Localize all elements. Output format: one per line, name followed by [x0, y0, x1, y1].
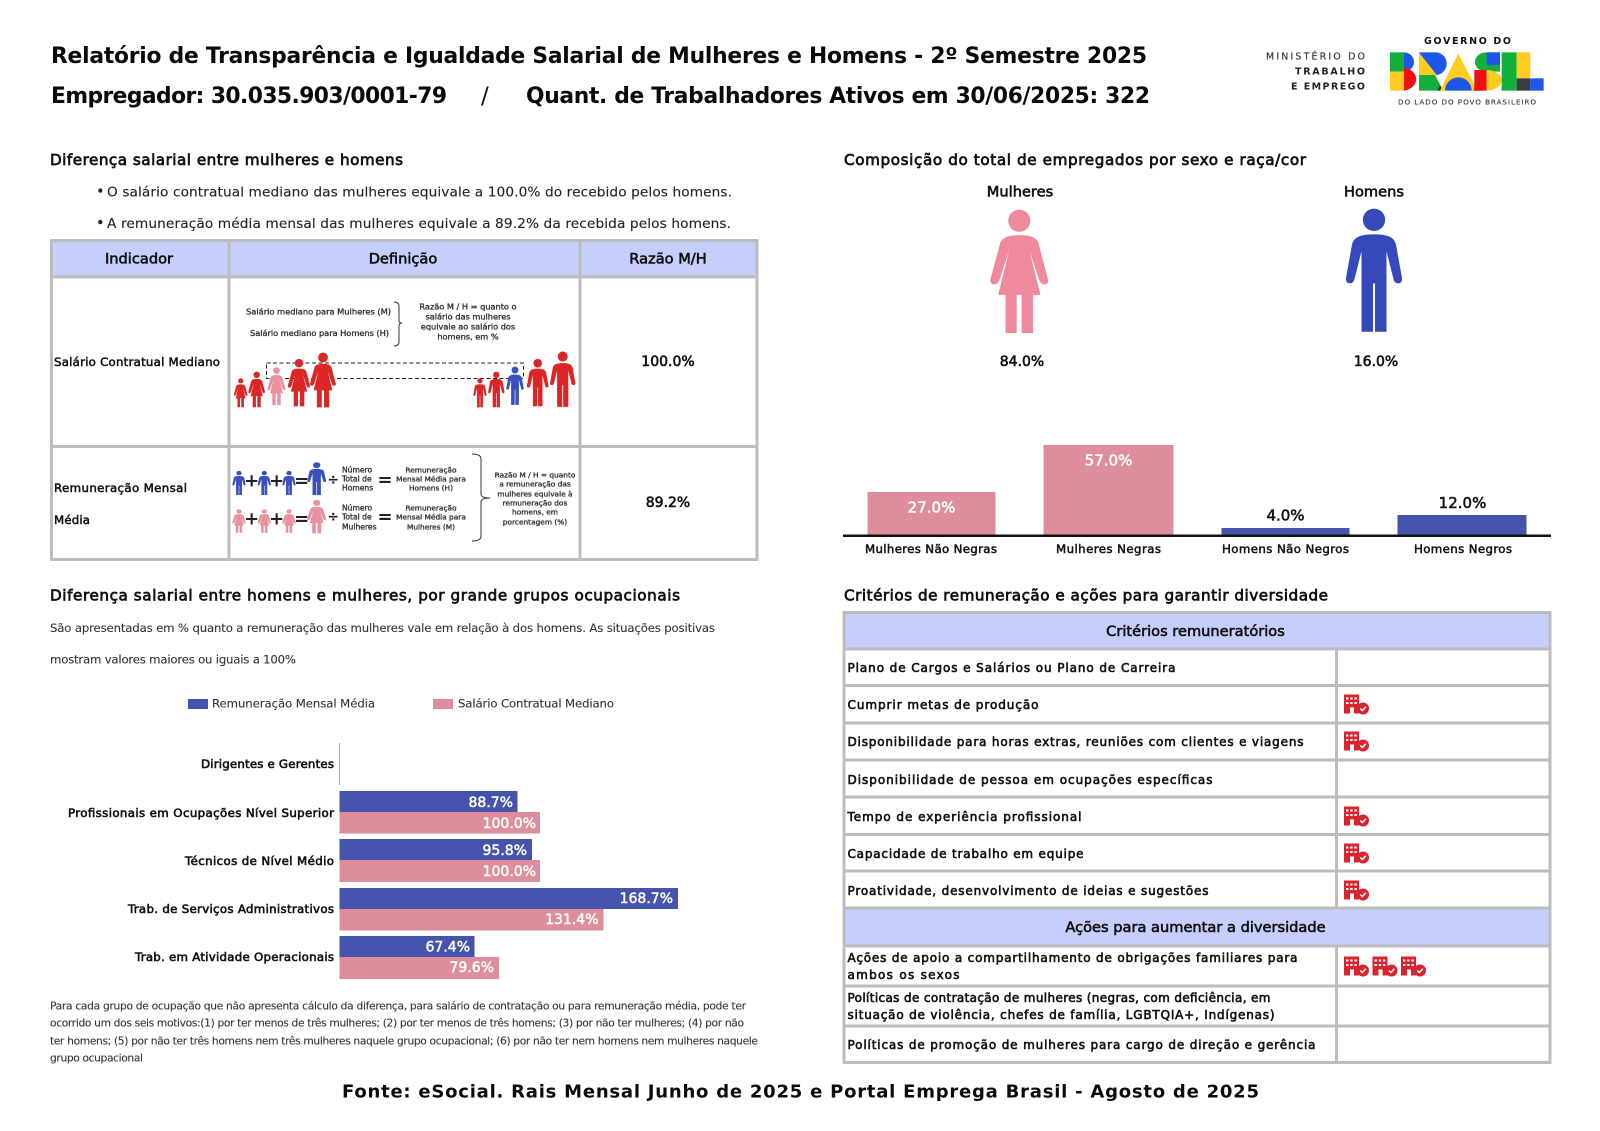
- panel: criteria table: Ações para aumentar a diversidade: [1065, 919, 1326, 936]
- diagram: remuneração média: +: [244, 470, 259, 492]
- diagram: remuneração média: +: [269, 508, 284, 530]
- bar chart: grupos ocupacionais: Trab. de Serviços Administrativos: [127, 902, 334, 916]
- text block: nota de rodapé: ter homens; (5) por não ter três homens nem três mulheres naquele grupo ocupacional; (6) por não ter nem homens nem mulheres naquele: [50, 1034, 758, 1048]
- bar chart: composição: Mulheres Não Negras: [865, 542, 997, 556]
- bar chart: grupos ocupacionais: 131.4%: [545, 912, 598, 928]
- title: Quant. de Trabalhadores Ativos em 30/06/2025: 322: [526, 84, 1150, 109]
- panel: indicators table: [51, 240, 757, 560]
- text block: bullets: A remuneração média mensal das mulheres equivale a 89.2% da recebida pelos homens.: [107, 216, 731, 232]
- diagram: remuneração média: ÷: [327, 509, 339, 525]
- logo: Ministério do Trabalho e Emprego: TRABALHO: [1295, 66, 1365, 78]
- diagram: remuneração média: homens, em: [512, 508, 558, 516]
- diagram: salário mediano: Razão M / H = quanto o: [419, 302, 517, 312]
- bar chart: grupos ocupacionais: 100.0%: [483, 816, 536, 832]
- panel: criteria table: Políticas de contratação de mulheres (negras, com deficiência, em: [848, 991, 1270, 1005]
- icon: homens: Homens: [1344, 184, 1404, 200]
- panel: criteria table: ambos os sexos: [848, 968, 960, 982]
- bar chart: grupos ocupacionais: Profissionais em Ocupações Nível Superior: [68, 806, 334, 820]
- logo: Governo do Brasil: DO LADO DO POVO BRASILEIRO: [1398, 98, 1536, 106]
- diagram: remuneração média: remuneração dos: [503, 498, 567, 508]
- icon: mulheres: Mulheres: [987, 184, 1053, 200]
- panel: indicators table: 89.2%: [646, 495, 690, 511]
- heading: grupos ocupacionais: Diferença salarial entre homens e mulheres, por grande grupos ocupacionais: [50, 586, 680, 604]
- panel: criteria table: Capacidade de trabalho em equipe: [848, 847, 1084, 861]
- diagram: remuneração média: +: [269, 470, 284, 492]
- diagram: remuneração média: Homens (H): [409, 484, 453, 492]
- bar chart: grupos ocupacionais: Dirigentes e Gerentes: [201, 757, 334, 771]
- diagram: remuneração média: Mulheres (M): [407, 522, 455, 532]
- diagram: remuneração média: mulheres equivale à: [497, 490, 573, 498]
- bar chart: grupos ocupacionais: 100.0%: [483, 864, 536, 880]
- panel: criteria table: Critérios remuneratórios: [1106, 623, 1285, 640]
- bar chart: composição: 4.0%: [1266, 506, 1305, 524]
- heading: diferença salarial: Diferença salarial entre mulheres e homens: [50, 151, 403, 169]
- heading: critérios: Critérios de remuneração e ações para garantir diversidade: [844, 586, 1328, 604]
- panel: indicators table: Definição: [369, 250, 437, 268]
- diagram: remuneração média: Mensal Média para: [396, 512, 466, 522]
- diagram: remuneração média: =: [294, 508, 309, 530]
- diagram: remuneração média: Total de: [341, 474, 372, 484]
- diagram: remuneração média: Remuneração: [405, 466, 457, 474]
- bar chart: grupos ocupacionais: [68, 743, 678, 979]
- panel: criteria table: Ações de apoio a compartilhamento de obrigações familiares para: [848, 951, 1298, 965]
- diagram: remuneração média: Número: [342, 504, 373, 512]
- diagram: salário mediano: Salário mediano para Homens (H): [250, 328, 389, 338]
- text block: nota de rodapé: Para cada grupo de ocupação que não apresenta cálculo da diferença, para salário de contratação ou para remuneração média, pode ter: [50, 1000, 747, 1012]
- panel: indicators table: Razão M/H: [629, 250, 707, 268]
- bar chart: grupos ocupacionais: Técnicos de Nível Médio: [184, 854, 334, 868]
- bar chart: composição: Homens Não Negros: [1222, 542, 1349, 556]
- panel: indicators table: 100.0%: [641, 354, 695, 370]
- diagram: remuneração média: Mulheres: [342, 522, 377, 532]
- diagram: remuneração média: =: [294, 470, 309, 492]
- title: [51, 44, 1150, 110]
- icon: homens: [1344, 184, 1404, 370]
- title: Relatório de Transparência e Igualdade Salarial de Mulheres e Homens - 2º Semestre 2025: [51, 44, 1147, 69]
- icon: mulheres: 84.0%: [1000, 354, 1044, 370]
- bar chart: grupos ocupacionais: 88.7%: [469, 795, 513, 811]
- title: Empregador: 30.035.903/0001-79: [51, 84, 447, 109]
- panel: criteria table: Disponibilidade para horas extras, reuniões com clientes e viagens: [848, 735, 1304, 749]
- diagram: remuneração média: ÷: [327, 472, 339, 488]
- diagram: remuneração média: a remuneração das: [499, 480, 571, 488]
- diagram: remuneração média: +: [244, 508, 259, 530]
- text block: bullets: •: [96, 216, 104, 231]
- bar chart: composição: Homens Negros: [1414, 542, 1512, 556]
- diagram: remuneração média: Número: [342, 466, 373, 474]
- bar chart: composição: 57.0%: [1085, 452, 1132, 470]
- legend: Remuneração Mensal Média: [212, 696, 375, 710]
- title: /: [481, 84, 489, 110]
- diagram: remuneração média: =: [377, 470, 393, 490]
- text block: explicação: [50, 621, 715, 666]
- diagram: salário mediano: salário das mulheres: [425, 312, 511, 322]
- text block: explicação: São apresentadas em % quanto a remuneração das mulheres vale em relação à dos homens. As situações positivas: [50, 621, 715, 635]
- legend: Salário Contratual Mediano: [458, 696, 614, 710]
- diagram: remuneração média: porcentagem (%): [503, 518, 567, 526]
- panel: criteria table: Proatividade, desenvolvimento de ideias e sugestões: [848, 884, 1208, 898]
- text block: nota de rodapé: grupo ocupacional: [50, 1052, 143, 1064]
- diagram: remuneração média: Homens: [342, 484, 373, 492]
- panel: criteria table: [844, 612, 1550, 1063]
- legend: [188, 696, 614, 710]
- panel: criteria table: situação de violência, chefes de família, LGBTQIA+, Indígenas): [848, 1008, 1274, 1022]
- logo: Governo do Brasil: [1390, 36, 1544, 106]
- bar chart: grupos ocupacionais: 168.7%: [620, 891, 673, 907]
- diagram: remuneração média: Remuneração: [405, 504, 457, 512]
- heading: composição: Composição do total de empregados por sexo e raça/cor: [844, 151, 1307, 169]
- diagram: remuneração média: Mensal Média para: [396, 474, 466, 484]
- panel: indicators table: Salário Contratual Mediano: [54, 355, 220, 369]
- bar chart: grupos ocupacionais: 79.6%: [450, 960, 494, 976]
- icons: empresa check: [1344, 694, 1426, 976]
- text block: bullets: •: [96, 184, 104, 200]
- logo: Ministério do Trabalho e Emprego: MINISTÉRIO DO: [1266, 50, 1365, 62]
- bar chart: grupos ocupacionais: 95.8%: [483, 843, 527, 859]
- diagram: remuneração média: Total de: [341, 512, 372, 522]
- panel: criteria table: Tempo de experiência profissional: [846, 810, 1082, 824]
- text block: explicação: mostram valores maiores ou iguais a 100%: [50, 652, 296, 666]
- panel: criteria table: Plano de Cargos e Salários ou Plano de Carreira: [848, 661, 1176, 675]
- bar chart: composição: 27.0%: [908, 498, 955, 516]
- icon: homens: 16.0%: [1354, 354, 1398, 370]
- diagram: salário mediano: equivale ao salário dos: [421, 322, 515, 332]
- bar chart: grupos ocupacionais: Trab. em Atividade Operacionais: [134, 950, 334, 964]
- bar chart: composição: Mulheres Negras: [1056, 542, 1161, 556]
- diagram: remuneração média: Razão M / H = quanto: [495, 470, 576, 480]
- panel: indicators table: Indicador: [105, 250, 173, 268]
- diagram: remuneração média: =: [377, 506, 393, 528]
- panel: criteria table: Cumprir metas de produção: [848, 698, 1038, 712]
- diagram: salário mediano: [234, 302, 575, 407]
- text block: bullets: O salário contratual mediano das mulheres equivale a 100.0% do recebido pelos homens.: [107, 184, 732, 200]
- diagram: salário mediano: homens, em %: [437, 332, 499, 342]
- icon: mulheres: [987, 184, 1053, 370]
- text block: nota de rodapé: [50, 1000, 758, 1064]
- panel: indicators table: Remuneração Mensal: [54, 481, 187, 495]
- bar chart: grupos ocupacionais: 67.4%: [426, 940, 470, 956]
- panel: criteria table: Políticas de promoção de mulheres para cargo de direção e gerência: [848, 1038, 1316, 1052]
- logo: Ministério do Trabalho e Emprego: [1266, 50, 1365, 92]
- bar chart: composição: 12.0%: [1439, 494, 1486, 512]
- logo: Ministério do Trabalho e Emprego: E EMPREGO: [1291, 82, 1365, 92]
- bar chart: composição: [843, 445, 1551, 556]
- footer source: Fonte: eSocial. Rais Mensal Junho de 2025 e Portal Emprega Brasil - Agosto de 2025: [342, 1082, 1259, 1102]
- text block: bullets: [96, 184, 732, 232]
- text block: nota de rodapé: ocorrido um dos seis motivos:(1) por ter menos de três mulheres; (2) por ter menos de três homens; (3) por não ter mulheres; (4) por não: [50, 1016, 744, 1030]
- logo: Governo do Brasil: GOVERNO DO: [1424, 36, 1511, 47]
- panel: indicators table: Média: [54, 513, 90, 527]
- panel: criteria table: Disponibilidade de pessoa em ocupações específicas: [848, 773, 1212, 787]
- diagram: remuneração média: [232, 454, 576, 541]
- diagram: salário mediano: Salário mediano para Mulheres (M): [246, 306, 391, 316]
